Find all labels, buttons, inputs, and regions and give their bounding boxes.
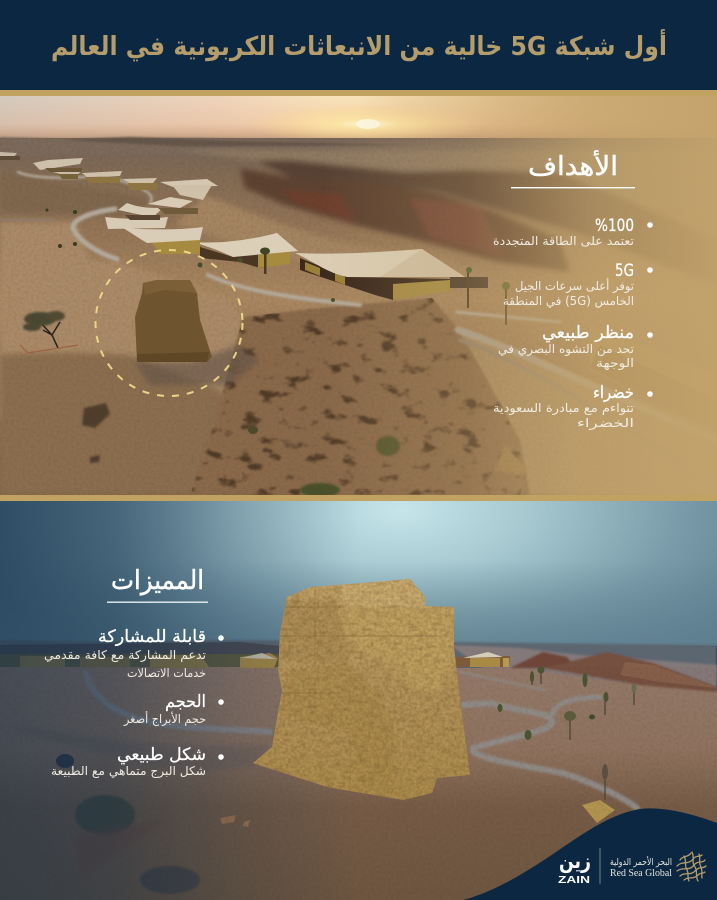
- goal: green: تتواءم مع مبادرة السعودية: [493, 401, 634, 416]
- logo: Red Sea Global: البحر الأحمر الدولية: [610, 856, 672, 868]
- goal: natural view: [498, 323, 653, 371]
- features heading: المميزات: [111, 566, 204, 596]
- photo: desert resort at sunset: [0, 96, 717, 497]
- feature: shareable: قابلة للمشاركة: [98, 627, 206, 647]
- dark rocks on sand: [82, 403, 110, 463]
- trees: [46, 208, 510, 325]
- feature: natural shape: شكل البرج متماهي مع الطبيعة: [51, 764, 206, 779]
- goals heading: [511, 149, 635, 188]
- logo: Zain: [558, 849, 591, 886]
- feature: natural shape: شكل طبيعي: [117, 745, 206, 765]
- title: أول شبكة 5G خالية من الانبعاثات الكربونية في العالم: [51, 29, 667, 62]
- rock tower (small): [135, 280, 212, 362]
- logo: Zain: زين: [559, 849, 591, 873]
- acacia tree: [23, 311, 65, 348]
- goal: green: الخضراء: [577, 416, 634, 431]
- goal: 5G: توفر أعلى سرعات الجيل: [515, 278, 634, 294]
- ridge: [259, 158, 680, 265]
- horizon hills: [0, 640, 717, 680]
- goal: natural view: تحد من التشوه البصري في: [498, 342, 634, 357]
- winding path: [460, 672, 637, 808]
- buildings far: [0, 652, 510, 668]
- goal: 5G: الخامس (5G) في المنطقة: [503, 294, 634, 309]
- goal: 100 percent: %100: [595, 216, 634, 236]
- goal: 100 percent: تعتمد على الطاقة المتجددة: [493, 234, 634, 248]
- dashed circle highlight: [96, 250, 242, 396]
- panel: bottom tower photo with features: [0, 501, 717, 900]
- logo: Zain: ZAIN: [558, 874, 590, 886]
- sand mid: [0, 220, 240, 393]
- logo panel: [463, 808, 717, 900]
- goal: natural view: منظر طبيعي: [542, 323, 634, 343]
- ground: [0, 667, 717, 900]
- roads: [0, 170, 649, 410]
- goals heading: الأهداف: [528, 149, 618, 182]
- sand hill below ridge: [178, 194, 376, 258]
- goal: 5G: [503, 261, 653, 309]
- header panel: [0, 0, 717, 90]
- goal: green: [493, 383, 653, 431]
- icon: Red Sea Global emblem: [677, 852, 706, 881]
- far building behind overlay: [590, 325, 717, 430]
- logo: Red Sea Global: Red Sea Global: [610, 868, 672, 879]
- resort tents: [0, 152, 488, 300]
- goal: 5G: 5G: [615, 261, 634, 281]
- foreground mound: [209, 298, 478, 494]
- left path: [85, 670, 272, 732]
- feature: natural shape: [51, 745, 224, 779]
- second: [200, 247, 273, 268]
- tower rock: [250, 575, 475, 805]
- red hills: [510, 652, 575, 668]
- scrub and stones: [75, 795, 135, 835]
- feature: shareable: [44, 627, 224, 680]
- goal: natural view: الوجهة: [596, 356, 634, 371]
- logo: Red Sea Global: [610, 856, 672, 879]
- main: [300, 258, 450, 300]
- goal: 100 percent: [493, 216, 653, 248]
- goal: green: خضراء: [593, 383, 634, 403]
- lower right slope: [470, 340, 619, 495]
- feature: size: حجم الأبراج أصغر: [123, 711, 206, 727]
- feature: shareable: خدمات الاتصالات: [127, 666, 206, 680]
- gold overlay: [356, 96, 717, 495]
- blue dusk overlay: [0, 501, 330, 900]
- trees: [532, 670, 634, 800]
- feature: size: [123, 692, 224, 727]
- photo: disguised tower at dusk: [0, 501, 717, 900]
- feature: size: الحجم: [165, 692, 206, 712]
- feature: shareable: تدعم المشاركة مع كافة مقدمي: [44, 648, 206, 663]
- panel: top desert resort photo with goals: [0, 96, 717, 497]
